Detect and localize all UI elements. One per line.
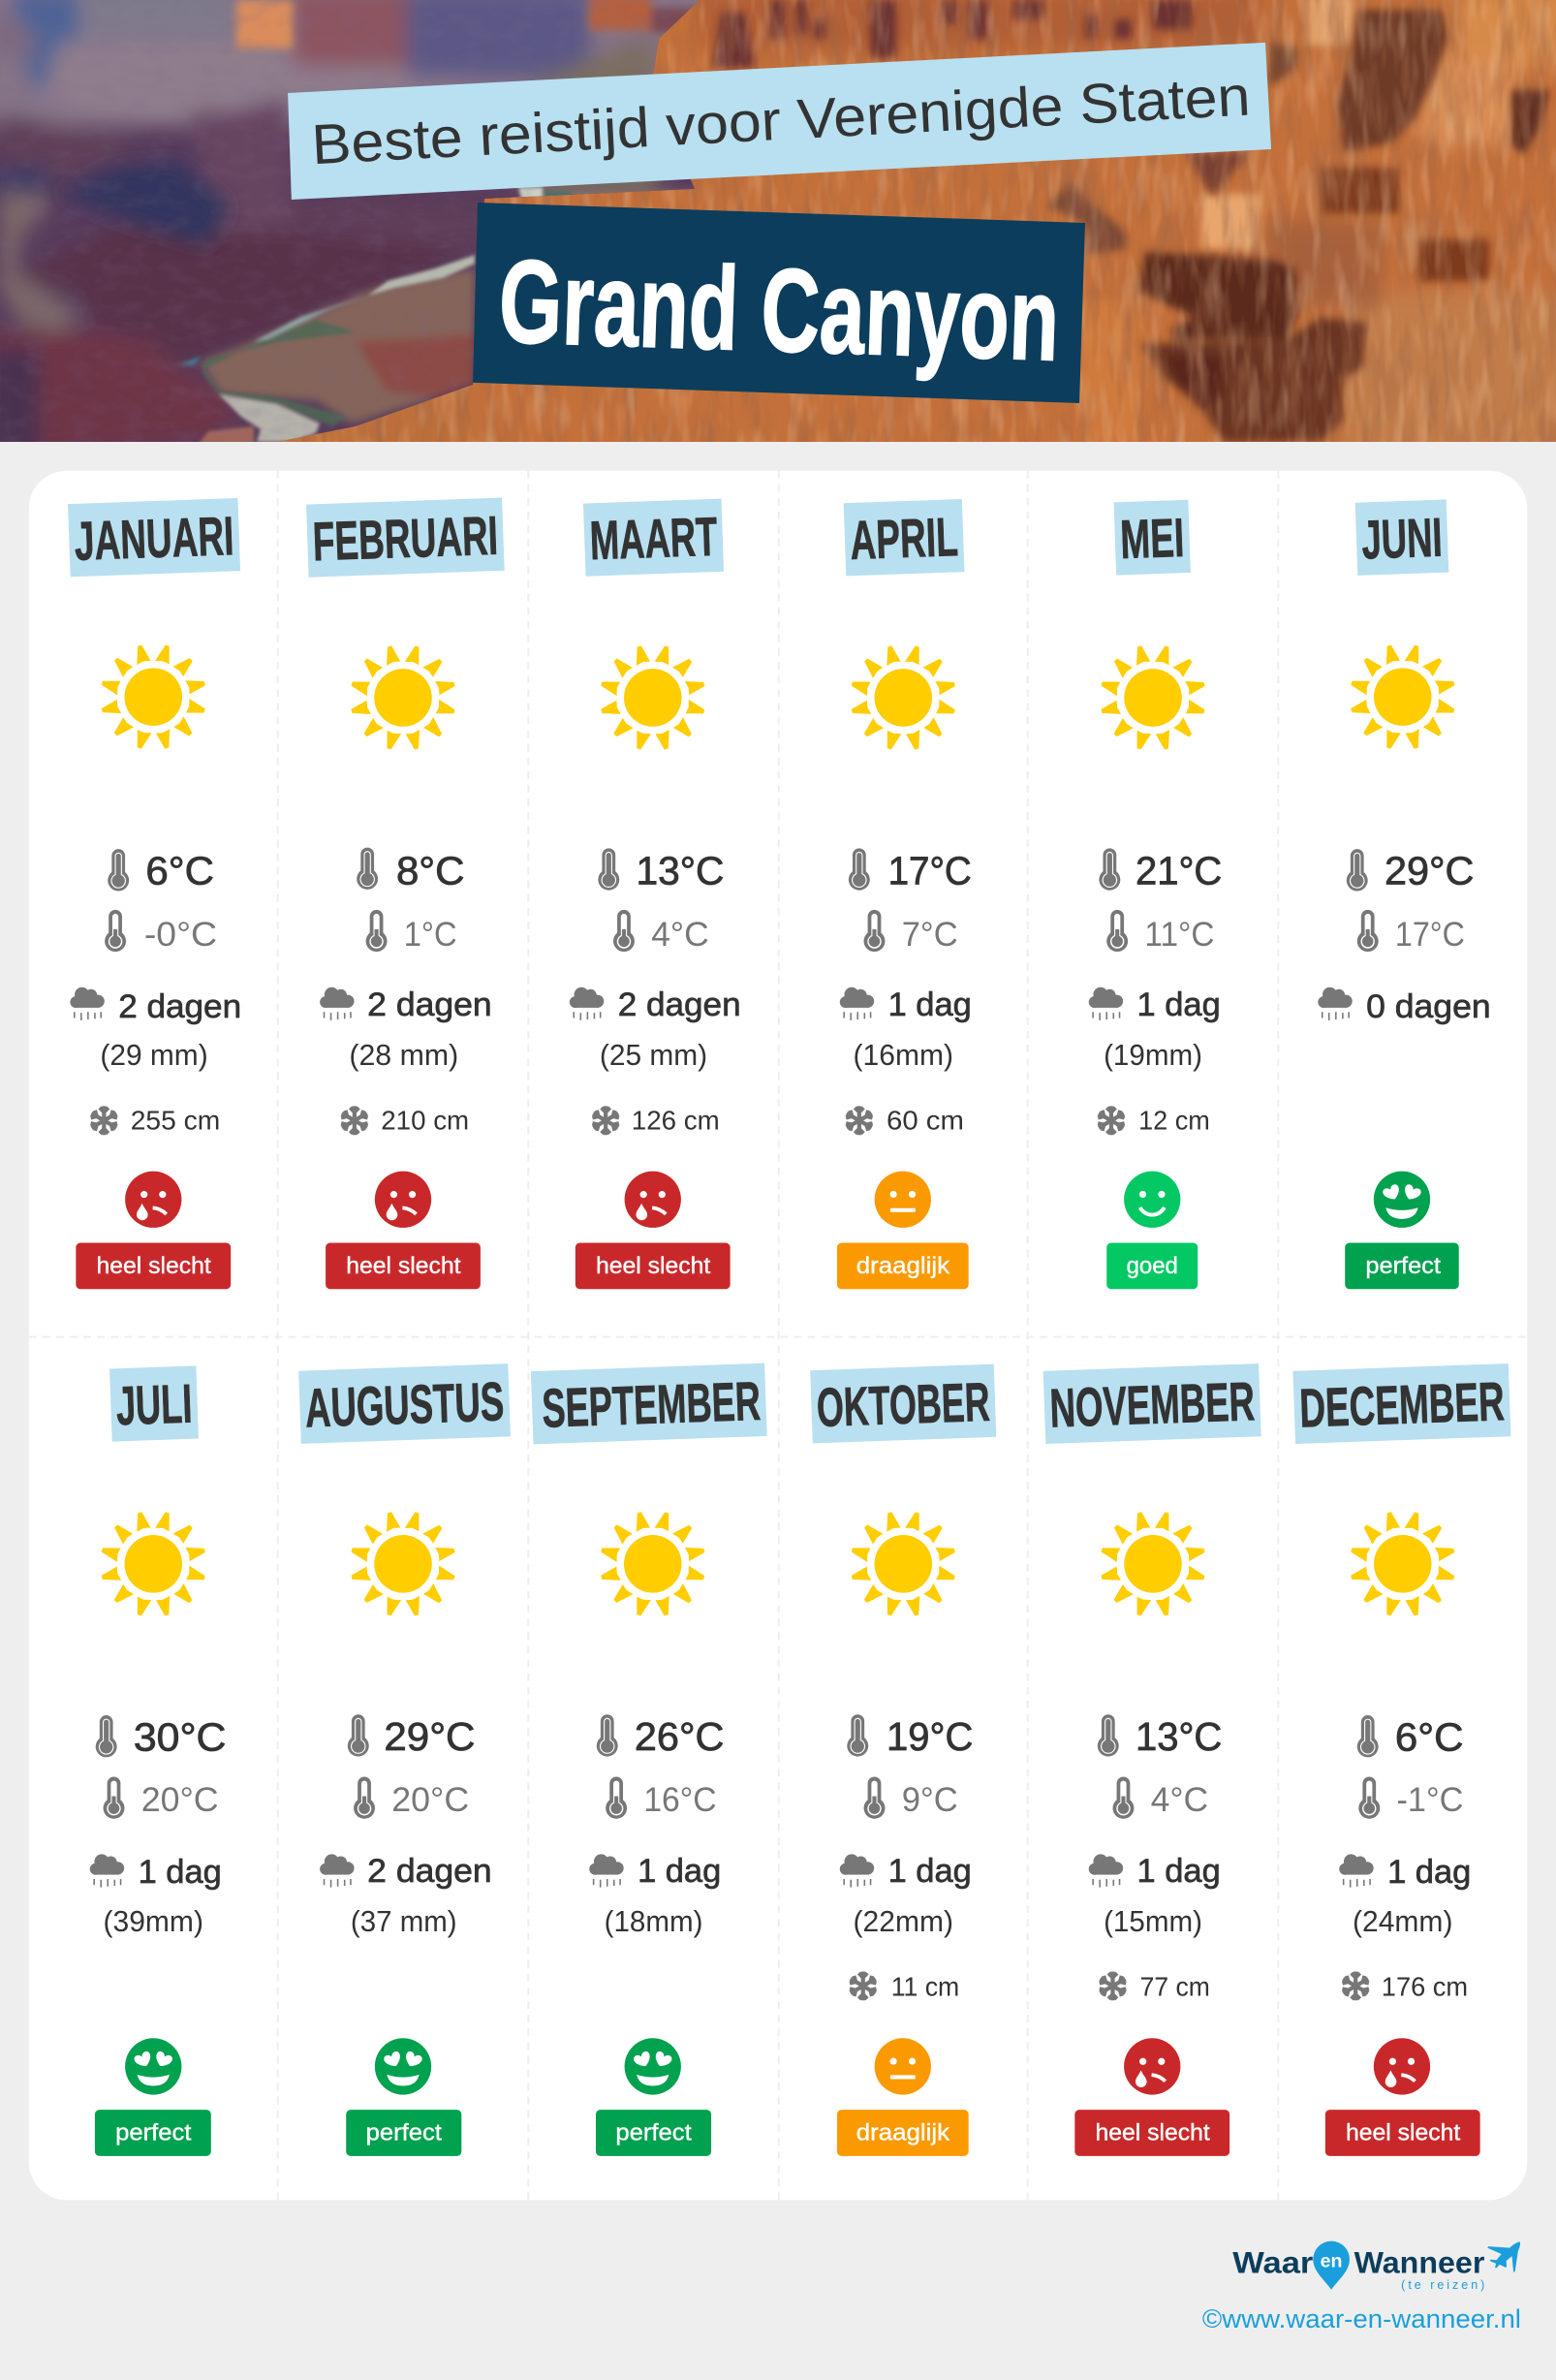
high temperature: 6°C bbox=[1395, 1715, 1463, 1760]
low temperature: 4°C bbox=[651, 916, 709, 954]
month label bbox=[531, 1363, 767, 1444]
rainfall: (25 mm) bbox=[600, 1039, 707, 1072]
low temperature: 11°C bbox=[1144, 916, 1214, 954]
snow depth bbox=[89, 1105, 220, 1136]
month label bbox=[1043, 1363, 1261, 1444]
snow depth bbox=[340, 1105, 469, 1136]
snow depth: 176 cm bbox=[1382, 1971, 1468, 2002]
rain days: 2 dagen bbox=[618, 986, 741, 1023]
title banner: Grand Canyon bbox=[497, 235, 1061, 386]
low temperature bbox=[354, 1776, 469, 1819]
low temperature bbox=[1358, 1776, 1463, 1819]
rain days: 1 dag bbox=[888, 1853, 972, 1890]
rainfall: (16mm) bbox=[854, 1039, 953, 1072]
title banner bbox=[473, 203, 1085, 403]
icon: rating face bbox=[625, 2038, 681, 2095]
rating badge: perfect bbox=[115, 2120, 192, 2146]
rainfall: (15mm) bbox=[1104, 1905, 1202, 1938]
icon: rating face bbox=[375, 2038, 431, 2095]
snow depth: 60 cm bbox=[887, 1105, 964, 1136]
rain days: 2 dagen bbox=[118, 988, 241, 1025]
rain days bbox=[840, 986, 972, 1023]
month label: AUGUSTUS bbox=[304, 1370, 505, 1438]
rating badge: heel slecht bbox=[96, 1253, 211, 1279]
rainfall: (28 mm) bbox=[349, 1039, 458, 1072]
rain days bbox=[1089, 1853, 1221, 1890]
rating badge bbox=[596, 2110, 711, 2156]
low temperature: -1°C bbox=[1396, 1781, 1463, 1819]
icon: sun bbox=[597, 1508, 709, 1620]
month label: NOVEMBER bbox=[1048, 1370, 1256, 1439]
low temperature bbox=[613, 910, 709, 954]
rating badge: perfect bbox=[366, 2120, 442, 2146]
low temperature: 9°C bbox=[902, 1781, 958, 1819]
icon: map pin: en bbox=[1321, 2250, 1343, 2271]
low temperature: -0°C bbox=[144, 916, 217, 954]
month: september bbox=[531, 1363, 767, 2156]
icon: rating face bbox=[875, 1172, 931, 1228]
rating badge bbox=[1325, 2110, 1480, 2156]
rating badge bbox=[76, 1242, 231, 1289]
high temperature: 13°C bbox=[637, 849, 724, 893]
high temperature: 19°C bbox=[887, 1714, 973, 1759]
month label bbox=[109, 1365, 199, 1442]
icon: map pin bbox=[1313, 2241, 1350, 2290]
high temperature bbox=[1098, 1714, 1222, 1759]
snow depth bbox=[845, 1105, 964, 1136]
panel: calendar card bbox=[29, 471, 1527, 2200]
icon: sun bbox=[347, 642, 459, 754]
rating badge bbox=[346, 2110, 461, 2156]
rain days: 1 dag bbox=[1387, 1854, 1471, 1891]
rating badge bbox=[1106, 1242, 1198, 1289]
snow depth bbox=[1097, 1105, 1210, 1136]
month label: MEI bbox=[1119, 507, 1185, 570]
low temperature bbox=[864, 1776, 958, 1819]
rainfall: (39mm) bbox=[104, 1905, 203, 1938]
rain days bbox=[1339, 1854, 1471, 1891]
snow depth: 255 cm bbox=[131, 1105, 220, 1136]
low temperature bbox=[1106, 910, 1214, 954]
logo word: Wanneer: Wanneer bbox=[1354, 2246, 1484, 2280]
rating badge bbox=[576, 1242, 731, 1289]
low temperature: 17°C bbox=[1395, 916, 1465, 954]
snow depth: 210 cm bbox=[381, 1105, 469, 1136]
month label bbox=[1355, 499, 1448, 576]
rain days: 1 dag bbox=[139, 1854, 222, 1891]
rainfall: (19mm) bbox=[1104, 1039, 1202, 1072]
month label: MAART bbox=[589, 506, 718, 571]
rating badge bbox=[1074, 2110, 1229, 2156]
icon: sun bbox=[1347, 641, 1459, 753]
rainfall: (29 mm) bbox=[100, 1039, 208, 1072]
month label bbox=[298, 1363, 511, 1444]
month: december bbox=[1292, 1363, 1510, 2156]
rainfall: (37 mm) bbox=[351, 1905, 457, 1938]
icon: sun bbox=[1097, 1508, 1209, 1620]
high temperature: 29°C bbox=[1385, 849, 1474, 893]
icon: rating face bbox=[125, 2038, 181, 2095]
icon: rating face bbox=[1374, 1172, 1430, 1228]
rainfall: (22mm) bbox=[854, 1905, 953, 1938]
header photo: Grand Canyon bbox=[0, 0, 1556, 455]
low temperature: 16°C bbox=[643, 1781, 717, 1819]
month label: JUNI bbox=[1360, 507, 1444, 570]
high temperature bbox=[1357, 1715, 1463, 1760]
high temperature bbox=[847, 1714, 973, 1759]
high temperature: 29°C bbox=[384, 1714, 475, 1759]
rating badge bbox=[1345, 1242, 1459, 1289]
rain days bbox=[70, 987, 241, 1025]
rain days: 1 dag bbox=[1137, 1853, 1221, 1890]
icon: sun bbox=[97, 1508, 209, 1620]
snow depth: 11 cm bbox=[891, 1971, 959, 2002]
rain days: 1 dag bbox=[1137, 986, 1221, 1023]
icon: rating face bbox=[875, 2038, 931, 2095]
month: juni bbox=[1318, 499, 1491, 1289]
rain days bbox=[1318, 987, 1491, 1025]
rain days bbox=[840, 1853, 972, 1890]
month label: APRIL bbox=[849, 506, 959, 571]
high temperature bbox=[849, 848, 972, 893]
logo word: Waar: Waar bbox=[1232, 2246, 1313, 2280]
month label: JANUARI bbox=[74, 505, 234, 572]
month label bbox=[810, 1364, 996, 1443]
rainfall: (24mm) bbox=[1353, 1905, 1452, 1938]
month: augustus bbox=[298, 1363, 511, 2156]
low temperature bbox=[105, 910, 217, 954]
icon: rating face bbox=[375, 1172, 431, 1228]
rating badge: goed bbox=[1127, 1253, 1178, 1279]
month: oktober bbox=[810, 1364, 996, 2156]
rating badge bbox=[837, 2110, 969, 2156]
rain days: 1 dag bbox=[888, 986, 972, 1023]
icon: sun bbox=[597, 642, 709, 754]
high temperature: 17°C bbox=[888, 849, 972, 893]
high temperature bbox=[348, 1714, 475, 1759]
footer url: ©www.waar-en-wanneer.nl bbox=[1202, 2304, 1521, 2333]
month: november bbox=[1043, 1363, 1261, 2156]
month label bbox=[68, 498, 240, 577]
rating badge bbox=[95, 2110, 211, 2156]
icon: sun bbox=[347, 1508, 459, 1620]
high temperature bbox=[1099, 848, 1222, 893]
icon: rating face bbox=[1374, 2038, 1430, 2095]
icon: sun bbox=[1097, 642, 1209, 754]
high temperature: 21°C bbox=[1136, 849, 1222, 893]
rain days bbox=[589, 1853, 721, 1890]
high temperature: 8°C bbox=[396, 849, 464, 893]
footer logo: Waar en Wanneer bbox=[1232, 2241, 1520, 2292]
high temperature bbox=[597, 1714, 724, 1759]
high temperature: 13°C bbox=[1136, 1714, 1222, 1759]
rating badge: heel slecht bbox=[1095, 2120, 1210, 2146]
subtitle banner bbox=[288, 43, 1271, 200]
rating badge: perfect bbox=[615, 2120, 692, 2146]
low temperature: 20°C bbox=[391, 1781, 469, 1819]
snow depth: 12 cm bbox=[1138, 1105, 1210, 1136]
icon: rating face bbox=[125, 1172, 181, 1228]
rating badge: draaglijk bbox=[856, 2120, 950, 2146]
icon: rating face bbox=[1124, 1172, 1180, 1228]
rainfall: (18mm) bbox=[605, 1905, 702, 1938]
low temperature bbox=[366, 910, 457, 954]
snow depth bbox=[1098, 1971, 1210, 2002]
icon: rating face bbox=[625, 1172, 681, 1228]
month: april bbox=[837, 499, 972, 1289]
month label: FEBRUARI bbox=[312, 505, 499, 572]
high temperature bbox=[598, 848, 724, 893]
snow depth: 77 cm bbox=[1140, 1971, 1210, 2002]
logo tagline: (te reizen) bbox=[1401, 2278, 1484, 2292]
low temperature bbox=[864, 910, 958, 954]
month: maart bbox=[570, 499, 741, 1289]
icon: sun bbox=[1347, 1508, 1459, 1620]
low temperature bbox=[104, 1776, 219, 1819]
low temperature bbox=[606, 1776, 717, 1819]
rating badge: heel slecht bbox=[346, 1253, 461, 1279]
snow depth bbox=[849, 1971, 959, 2002]
snow depth bbox=[1341, 1971, 1468, 2002]
month label bbox=[844, 499, 964, 576]
subtitle banner: Beste reistijd voor Verenigde Staten bbox=[310, 66, 1252, 176]
rating badge: perfect bbox=[1365, 1253, 1441, 1279]
low temperature: 4°C bbox=[1151, 1781, 1208, 1819]
low temperature bbox=[1112, 1776, 1208, 1819]
high temperature bbox=[108, 849, 214, 893]
icon: sun bbox=[97, 641, 209, 753]
rating badge: draaglijk bbox=[856, 1253, 950, 1279]
rain days bbox=[90, 1854, 222, 1891]
high temperature: 26°C bbox=[635, 1714, 724, 1759]
rain days: 0 dagen bbox=[1366, 988, 1491, 1025]
rating badge: heel slecht bbox=[596, 1253, 711, 1279]
month label bbox=[1114, 500, 1191, 576]
month: januari bbox=[68, 498, 241, 1289]
snow depth bbox=[591, 1105, 720, 1136]
month label: OKTOBER bbox=[816, 1371, 991, 1438]
rating badge bbox=[326, 1242, 481, 1289]
rating badge bbox=[837, 1242, 969, 1289]
month: juli bbox=[90, 1365, 226, 2156]
low temperature: 20°C bbox=[141, 1781, 219, 1819]
icon: rating face bbox=[1124, 2038, 1180, 2095]
high temperature bbox=[357, 848, 464, 893]
high temperature: 6°C bbox=[145, 849, 214, 893]
icon: sun bbox=[847, 642, 959, 754]
icon: sun bbox=[847, 1508, 959, 1620]
rain days: 2 dagen bbox=[367, 1853, 492, 1890]
month label bbox=[583, 499, 724, 577]
rating badge: heel slecht bbox=[1346, 2120, 1461, 2146]
low temperature: 7°C bbox=[902, 916, 958, 954]
high temperature bbox=[96, 1715, 226, 1760]
month label: JULI bbox=[115, 1373, 193, 1436]
high temperature bbox=[1347, 849, 1474, 893]
low temperature bbox=[1357, 910, 1465, 954]
month: februari bbox=[306, 498, 505, 1289]
month label: SEPTEMBER bbox=[541, 1370, 762, 1439]
month label bbox=[306, 498, 505, 578]
icon: airplane bbox=[1487, 2241, 1520, 2272]
low temperature: 1°C bbox=[404, 916, 457, 954]
high temperature: 30°C bbox=[134, 1715, 226, 1760]
rain days: 1 dag bbox=[638, 1853, 721, 1890]
rain days: 2 dagen bbox=[367, 986, 492, 1023]
rain days bbox=[1089, 986, 1221, 1023]
snow depth: 126 cm bbox=[632, 1105, 720, 1136]
month: mei bbox=[1089, 500, 1222, 1289]
